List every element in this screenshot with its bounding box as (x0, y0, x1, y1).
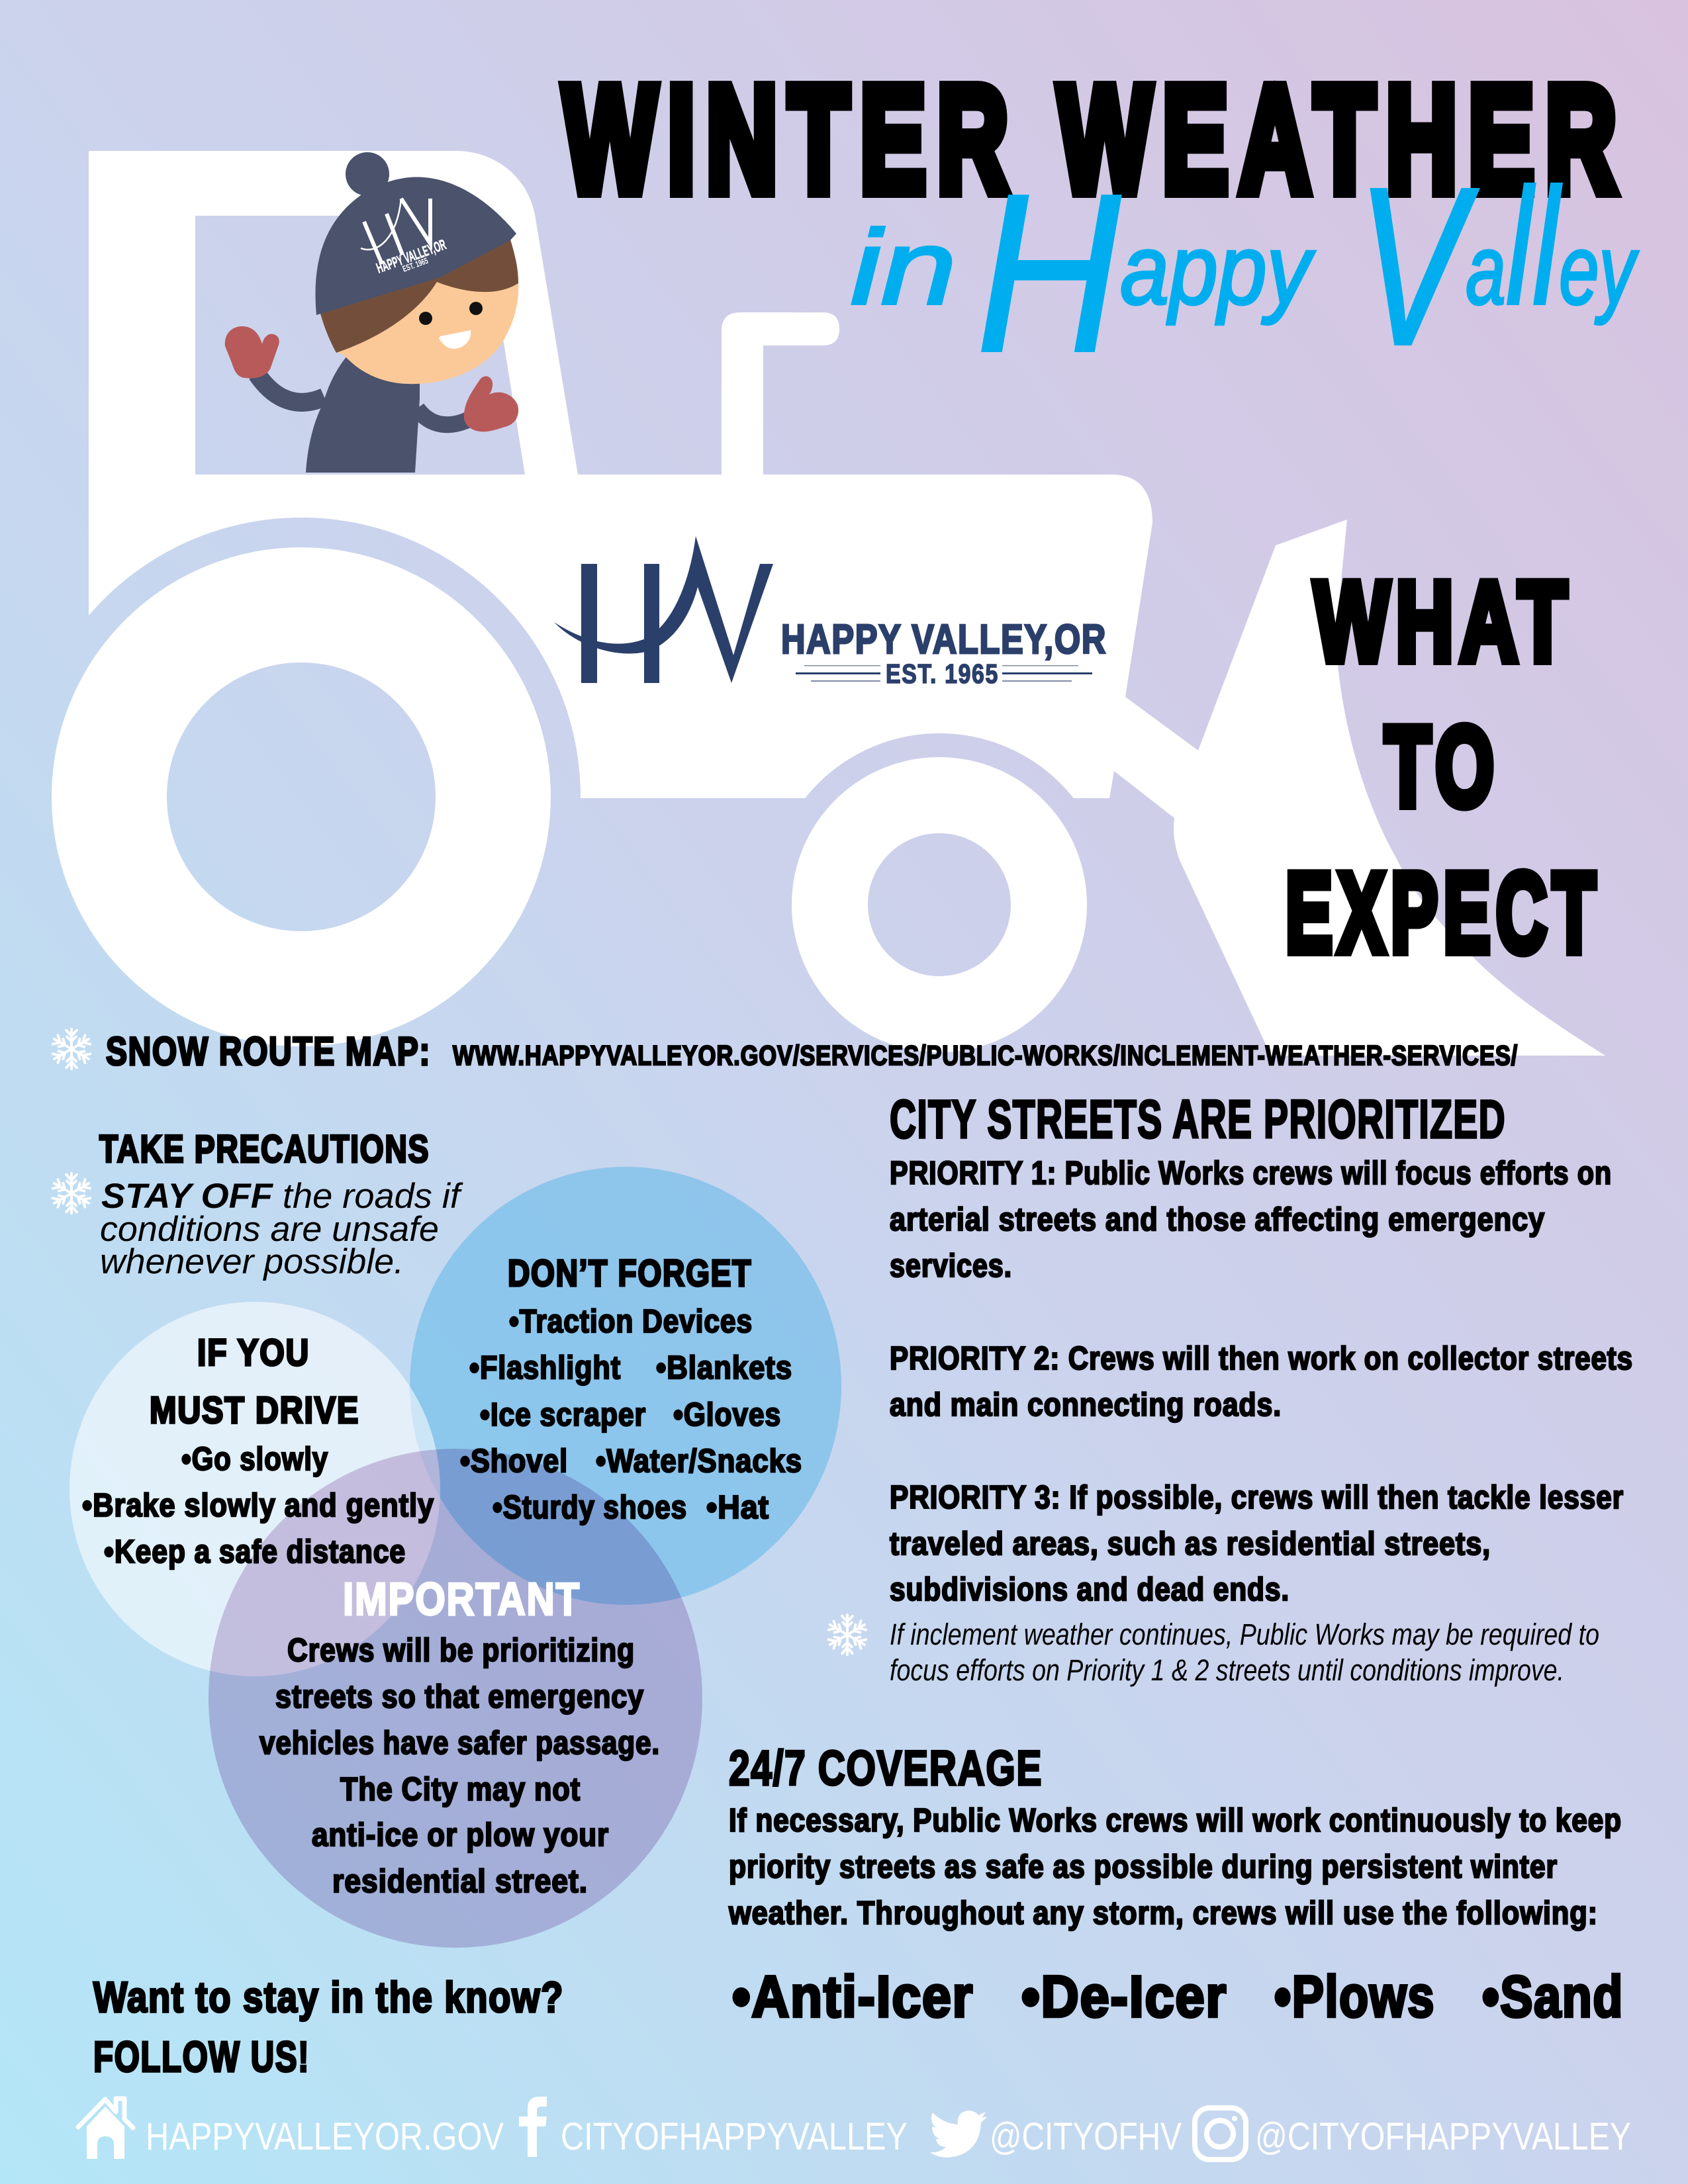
website link: HAPPYVALLEYOR.GOV (146, 2115, 504, 2158)
subtitle word: Happy: H (976, 148, 1123, 399)
follow us call to action (93, 1973, 564, 2081)
hat logo: HAPPY VALLEY,OR (374, 236, 448, 277)
supplies list: •Ice scraper (480, 1397, 646, 1433)
supplies list: •Flashlight (469, 1350, 621, 1386)
tractor body, exhaust and plow (89, 151, 1605, 1056)
hat logo (361, 199, 448, 277)
hat logo: EST. 1965 (401, 255, 430, 274)
precaution text line one: STAY OFF the roads if (101, 1177, 463, 1216)
coverage body copy: priority streets as safe as possible during persistent winter (729, 1849, 1558, 1885)
circle: important (209, 1449, 702, 1948)
treatments list: •Plows (1274, 1964, 1435, 2029)
subtitle word: Valley: V (1357, 141, 1479, 392)
smile (439, 330, 471, 349)
treatments list (732, 1964, 1624, 2029)
right mitten (464, 377, 518, 432)
pompom (346, 152, 389, 196)
heading: if you must drive: IF YOU (197, 1332, 310, 1374)
subtitle word: in: in (851, 208, 957, 326)
heading: if you must drive (150, 1332, 359, 1432)
supplies list: •Sturdy shoes (492, 1490, 687, 1525)
circle: don't forget (410, 1167, 841, 1605)
snow route label: SNOW ROUTE MAP: (106, 1029, 431, 1073)
icon: facebook (519, 2097, 547, 2157)
heading: take precautions: TAKE PRECAUTIONS (99, 1128, 430, 1171)
subtitle word: Valley: lley (1506, 154, 1664, 339)
heading: if you must drive: MUST DRIVE (150, 1389, 359, 1432)
precaution text line two: conditions are unsafe (100, 1210, 439, 1249)
logo wordmark: HAPPY VALLEY,OR (781, 617, 1107, 662)
heading: 24/7 coverage: 24/7 COVERAGE (729, 1741, 1043, 1796)
subtitle word: Happy: appy (1120, 214, 1315, 325)
priority 2 (890, 1341, 1633, 1423)
city logo on tractor (554, 536, 1107, 689)
treatments list: •Anti-Icer (732, 1964, 974, 2029)
precaution text line three: whenever possible. (100, 1242, 404, 1281)
inclement weather note (890, 1617, 1599, 1687)
tractor illustration (89, 151, 1605, 1056)
logo rules (796, 665, 1092, 682)
priority 1: services. (890, 1248, 1012, 1284)
icon: instagram (1195, 2108, 1246, 2160)
subtitle word: Valley: a (1466, 214, 1506, 325)
twitter handle: @CITYOFHV (990, 2115, 1182, 2158)
inclement weather note: focus efforts on Priority 1 & 2 streets until conditions improve. (890, 1653, 1564, 1687)
script subtitle (851, 141, 1639, 399)
eyes (419, 302, 483, 325)
priority 1 (890, 1156, 1612, 1284)
follow us call to action: Want to stay in the know? (93, 1973, 564, 2021)
heading: important: IMPORTANT (343, 1573, 581, 1625)
priority 1: arterial streets and those affecting emergency (890, 1202, 1545, 1238)
supplies list: •Blankets (656, 1350, 792, 1386)
hair (320, 240, 518, 353)
supplies list: •Water/Snacks (596, 1443, 802, 1479)
snow route map row (52, 1029, 1518, 1073)
driving tips list: •Keep a safe distance (104, 1534, 406, 1570)
icon: snowflake (827, 1615, 867, 1655)
priority 3: subdivisions and dead ends. (890, 1572, 1289, 1608)
important body copy: residential street. (332, 1864, 588, 1899)
front wheel (830, 796, 1049, 1014)
important body copy: The City may not (340, 1772, 581, 1807)
coverage body copy: weather. Throughout any storm, crews will use the following: (728, 1895, 1598, 1931)
treatments list: •Sand (1482, 1964, 1624, 2029)
panel: 24/7 coverage (728, 1741, 1624, 2029)
don't forget text (460, 1252, 802, 1525)
supplies list: •Traction Devices (509, 1304, 753, 1340)
HW monogram (554, 536, 773, 683)
icon: twitter (930, 2111, 988, 2158)
follow us call to action: FOLLOW US! (93, 2032, 310, 2081)
facebook handle: CITYOFHAPPYVALLEY (561, 2115, 908, 2158)
heading line: WHAT: WHAT (1314, 559, 1573, 685)
logo established year: EST. 1965 (886, 659, 999, 689)
take precautions block (52, 1128, 463, 1281)
character driver waving (225, 152, 518, 473)
circle: if you must drive (70, 1302, 440, 1676)
torso (306, 356, 420, 473)
supplies list (460, 1304, 802, 1525)
treatments list: •De-Icer (1021, 1964, 1227, 2029)
important body copy (259, 1633, 660, 1899)
supplies list: •Hat (706, 1490, 769, 1525)
important body copy: Crews will be prioritizing (287, 1633, 635, 1668)
heading: don't forget: DON’T FORGET (508, 1252, 752, 1295)
driving tips list: •Brake slowly and gently (82, 1488, 434, 1524)
important body copy: streets so that emergency (275, 1679, 644, 1715)
heading line: TO: TO (1385, 704, 1500, 830)
icon: snowflake (52, 1173, 91, 1213)
priority 2: and main connecting roads. (890, 1387, 1282, 1423)
important body copy: vehicles have safer passage. (259, 1725, 660, 1761)
panel: city streets are prioritized (827, 1089, 1633, 1687)
left mitten (225, 326, 279, 379)
rear wheel (109, 605, 493, 989)
icon: house (78, 2099, 133, 2159)
driving tips list (82, 1441, 434, 1570)
hat (316, 177, 516, 315)
icon: snowflake (52, 1029, 91, 1069)
face (334, 279, 518, 384)
important text (259, 1573, 660, 1899)
social footer (78, 2097, 1631, 2160)
coverage body copy (728, 1803, 1622, 1931)
supplies list: •Shovel (460, 1443, 568, 1479)
driving tips list: •Go slowly (181, 1441, 328, 1477)
priority 3: traveled areas, such as residential streets, (890, 1526, 1491, 1562)
supplies list: •Gloves (673, 1397, 781, 1433)
priority 3 (890, 1480, 1624, 1608)
if you must drive text (82, 1332, 434, 1570)
left arm (257, 374, 324, 402)
right arm (417, 408, 471, 425)
important body copy: anti-ice or plow your (312, 1817, 609, 1853)
what to expect heading (1286, 559, 1601, 976)
